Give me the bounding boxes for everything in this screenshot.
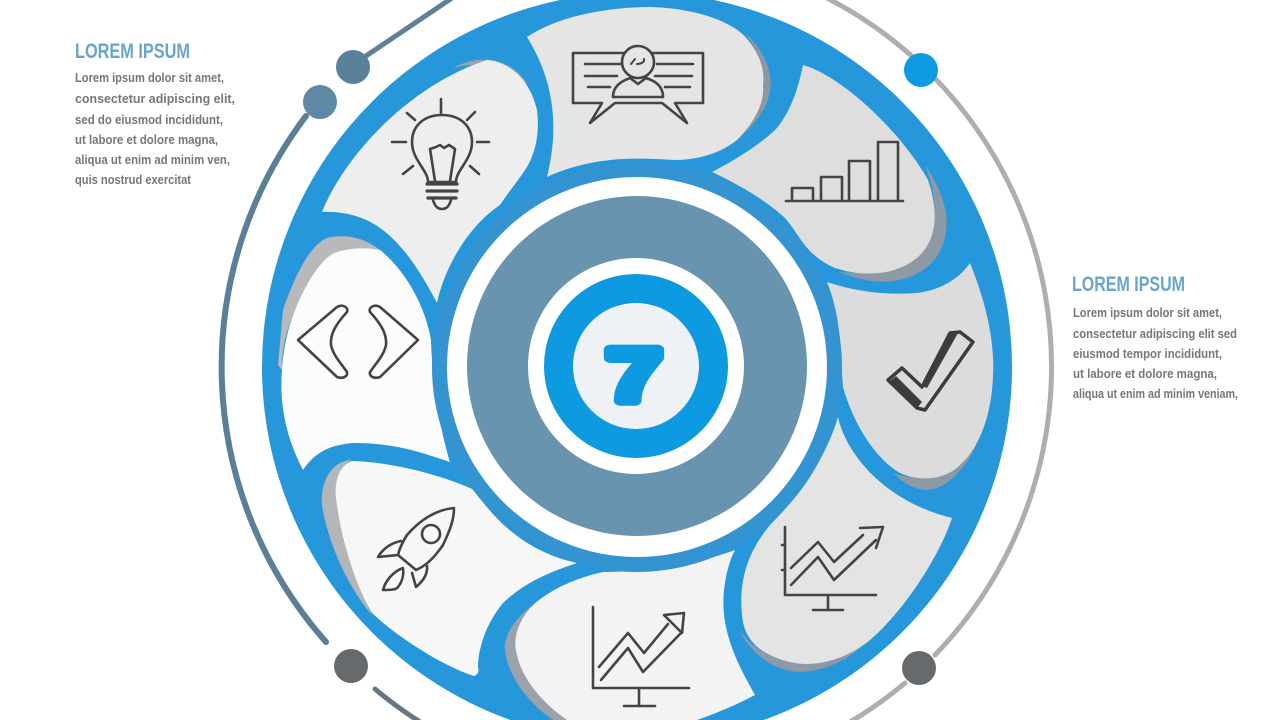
icon: trend chart monitor: [593, 607, 689, 706]
paragraph: right: consectetur adipiscing elit sed: [1073, 327, 1237, 341]
orbit arc: top left: [363, 0, 452, 58]
petal: rocket: [322, 460, 577, 676]
paragraph: left: sed do eiusmod incididunt,: [75, 113, 223, 127]
paragraph: left: ut labore et dolore magna,: [75, 133, 218, 147]
dot: upper left 2: [303, 85, 337, 119]
white ring: [447, 177, 827, 557]
icon: code arrows: [298, 306, 418, 378]
orbit arc: bottom right: [845, 683, 905, 720]
heading: right: LOREM IPSUM: [1072, 273, 1185, 296]
petal: light bulb: [322, 60, 538, 303]
heading: left: LOREM IPSUM: [75, 40, 190, 63]
paragraph: left: consectetur adipiscing elit,: [75, 92, 235, 106]
icon: trend chart small: [782, 527, 883, 610]
paragraph: right: ut labore et dolore magna,: [1073, 367, 1217, 381]
paragraph: right: eiusmod tempor incididunt,: [1073, 347, 1222, 361]
orbit arc: right: [815, 0, 1052, 655]
petal: trend chart bottom: [505, 550, 755, 720]
orbit arc: left: [222, 116, 326, 642]
paragraph: left: aliqua ut enim ad minim ven,: [75, 153, 230, 167]
icon: bar chart: [786, 142, 903, 201]
dot: upper left 1: [336, 50, 370, 84]
paragraph: right: Lorem ipsum dolor sit amet,: [1073, 306, 1222, 320]
dot: lower right: [902, 651, 936, 685]
outer orbit ring with dots: [222, 0, 1052, 720]
paragraph: right: [1073, 306, 1238, 401]
text block: right: [1072, 273, 1238, 401]
icon: speech bubble with person: [573, 46, 703, 123]
badge: white rim: [528, 258, 744, 474]
badge: inner disc: [573, 303, 699, 429]
badge: blue ring: [544, 274, 728, 458]
icon: check mark: [888, 332, 973, 410]
number seven: 7: [606, 334, 662, 417]
inner blue ring: [432, 162, 842, 572]
petal: trend chart right: [740, 417, 952, 672]
petal: code arrows: [278, 236, 450, 470]
petal: speech: [527, 7, 771, 177]
petal: bars: [712, 65, 947, 282]
paragraph: left: quis nostrud exercitat: [75, 173, 192, 187]
orbit arc: bottom left: [375, 689, 425, 720]
blue wheel disc: [262, 0, 1012, 720]
paragraph: right: aliqua ut enim ad minim veniam,: [1073, 387, 1238, 401]
paragraph: left: Lorem ipsum dolor sit amet,: [75, 71, 224, 85]
dot: lower left: [334, 649, 368, 683]
icon: rocket: [378, 508, 454, 590]
text block: left: [75, 40, 235, 187]
dot: upper right: [904, 53, 938, 87]
petal: check: [827, 263, 993, 490]
center badge: [528, 258, 744, 474]
slate ring: [467, 196, 807, 536]
icon: light bulb: [392, 99, 489, 209]
paragraph: left: [75, 71, 235, 187]
